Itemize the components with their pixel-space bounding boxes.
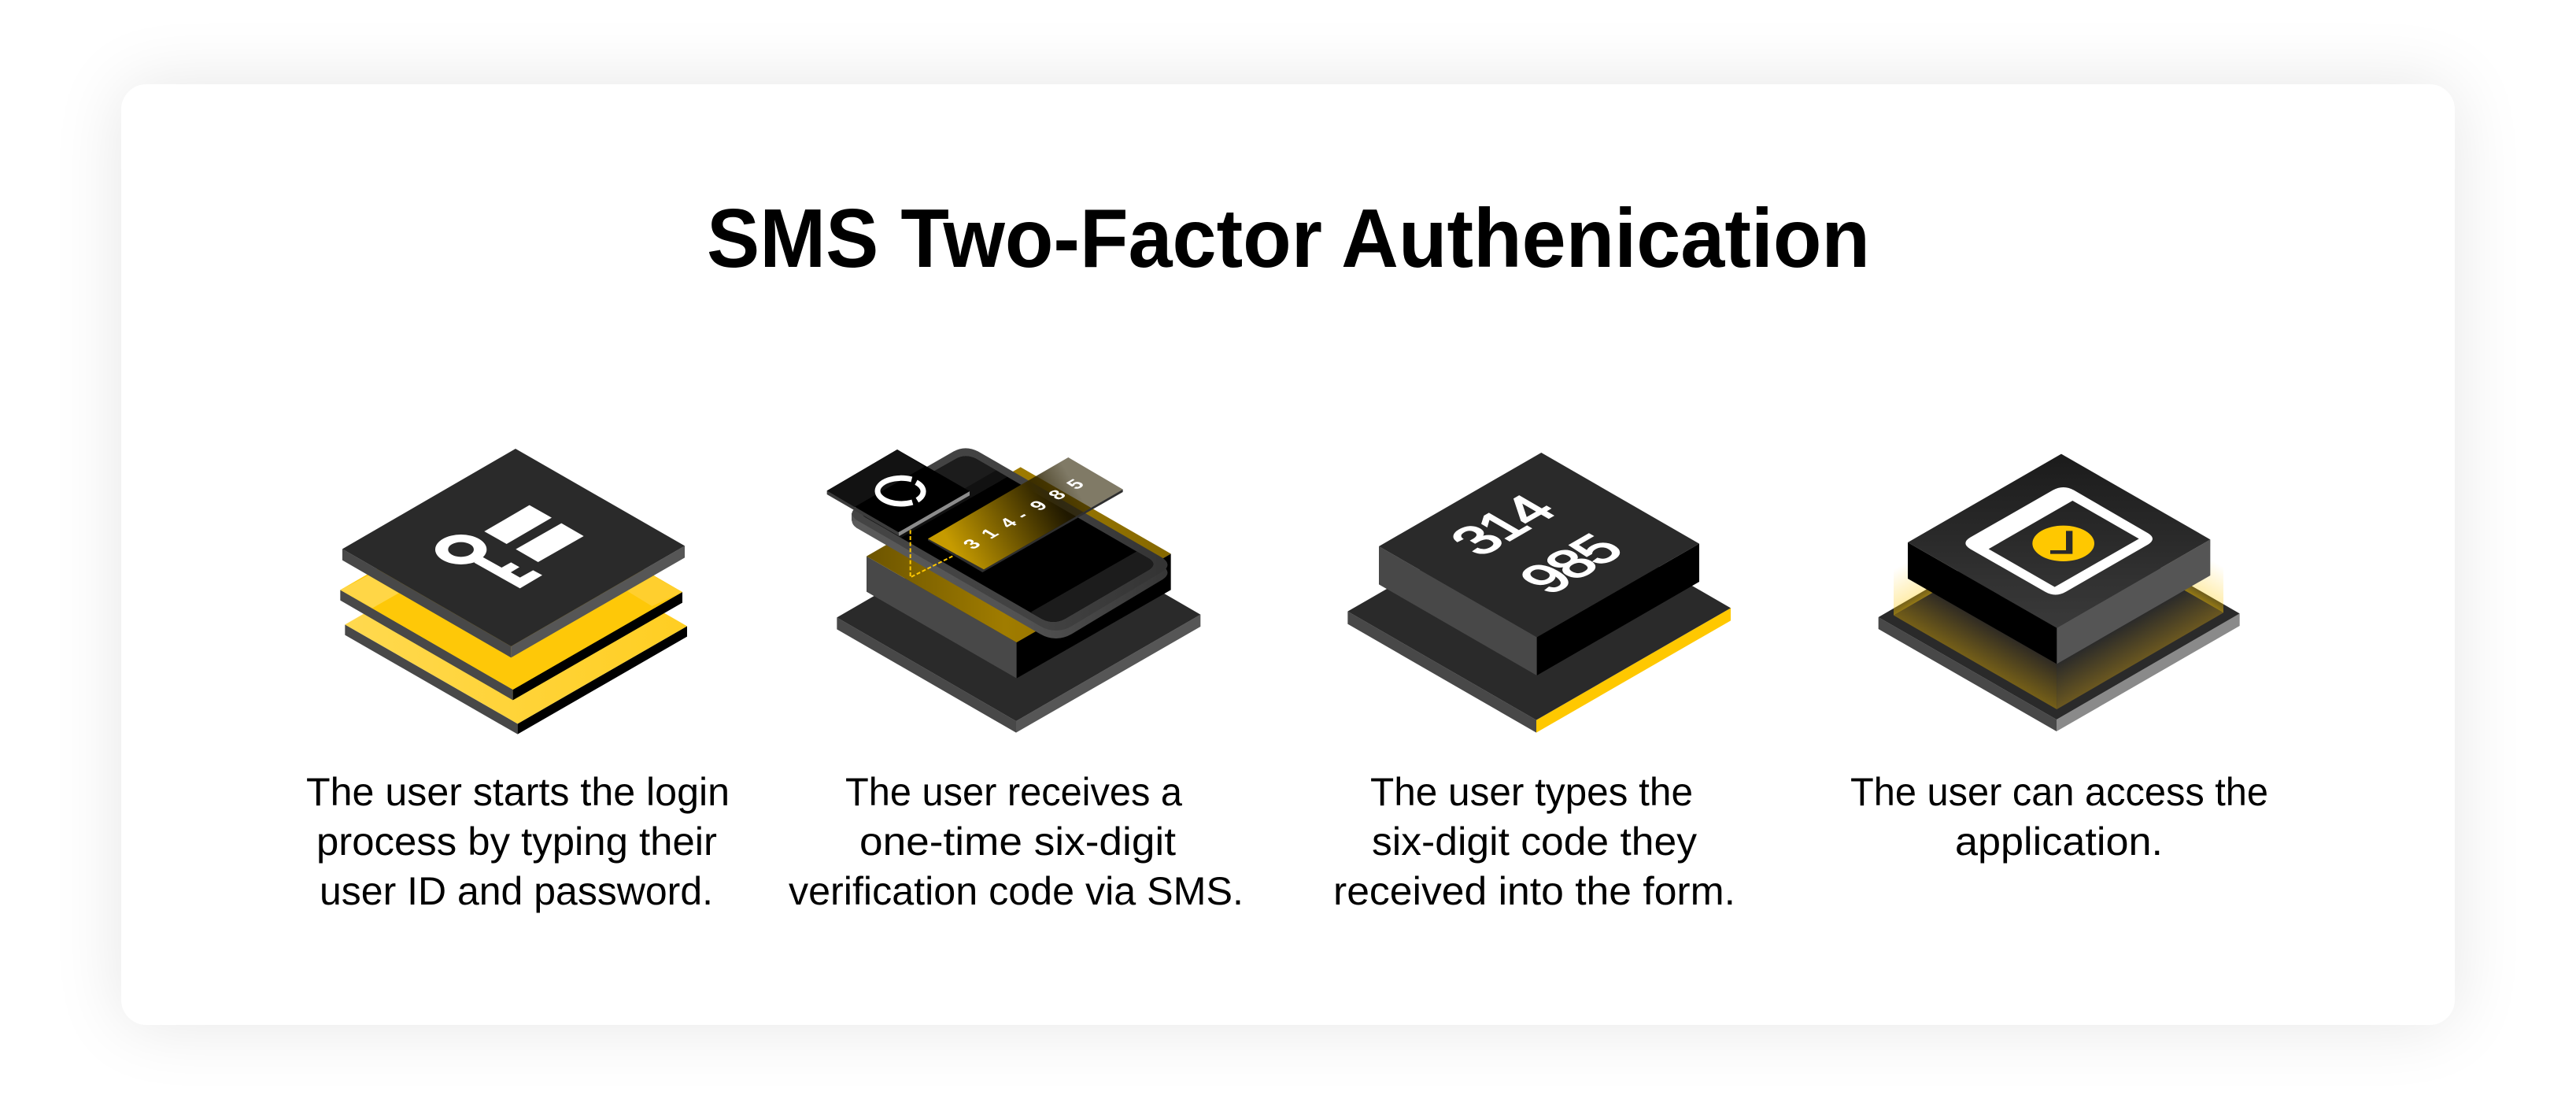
raised block xyxy=(1908,454,2210,664)
icon: key on stacked layers xyxy=(340,449,687,734)
icon: yellow check badge xyxy=(2032,526,2094,561)
text block: step 3 xyxy=(1333,770,1735,913)
middle yellow layer xyxy=(340,492,682,700)
icon: password bars xyxy=(484,505,584,562)
text block: step 3: received into the form. xyxy=(1333,869,1735,913)
code digits: 985 xyxy=(1506,526,1638,602)
top dark layer xyxy=(342,449,685,657)
title: SMS Two-Factor Authenication xyxy=(707,192,1870,285)
text block: step 2: one-time six-digit xyxy=(859,820,1176,864)
base plate xyxy=(1879,511,2240,731)
raised block xyxy=(867,467,1171,679)
text block: step 2: verification code via SMS. xyxy=(789,869,1244,913)
code digits: 314-985 xyxy=(959,476,1089,552)
text block: step 3: The user types the xyxy=(1370,770,1693,814)
icon: rounded frame xyxy=(1965,487,2153,594)
floating spinner card xyxy=(827,450,970,536)
text block: step 1: The user starts the login xyxy=(306,770,730,814)
base plate xyxy=(1347,499,1731,733)
icon: loading ring xyxy=(878,478,923,504)
text block: step 4: application. xyxy=(1955,820,2163,864)
text block: step 1: process by typing their xyxy=(316,820,717,864)
bottom yellow layer xyxy=(345,527,687,734)
code strip xyxy=(928,457,1123,572)
text block: step 4 xyxy=(1850,770,2268,864)
text block: step 1 xyxy=(306,770,730,913)
text block: step 2 xyxy=(789,770,1244,913)
icon: phone receiving code xyxy=(827,441,1200,733)
dashed connector xyxy=(911,506,960,577)
panel: white card xyxy=(121,84,2455,1025)
text block: step 3: six-digit code they xyxy=(1372,820,1697,864)
text block: step 4: The user can access the xyxy=(1850,770,2268,814)
text block: step 1: user ID and password. xyxy=(320,869,713,913)
base plate xyxy=(837,511,1200,733)
icon: typed code block xyxy=(1347,453,1731,733)
phone xyxy=(852,448,1168,638)
code digits xyxy=(1437,487,1638,602)
icon: access granted block xyxy=(1879,454,2240,731)
raised block xyxy=(1379,453,1699,675)
text block: step 2: The user receives a xyxy=(845,770,1182,814)
code digits: 314 xyxy=(1437,487,1570,564)
yellow glow xyxy=(1894,536,2223,709)
icon: key xyxy=(435,535,542,588)
